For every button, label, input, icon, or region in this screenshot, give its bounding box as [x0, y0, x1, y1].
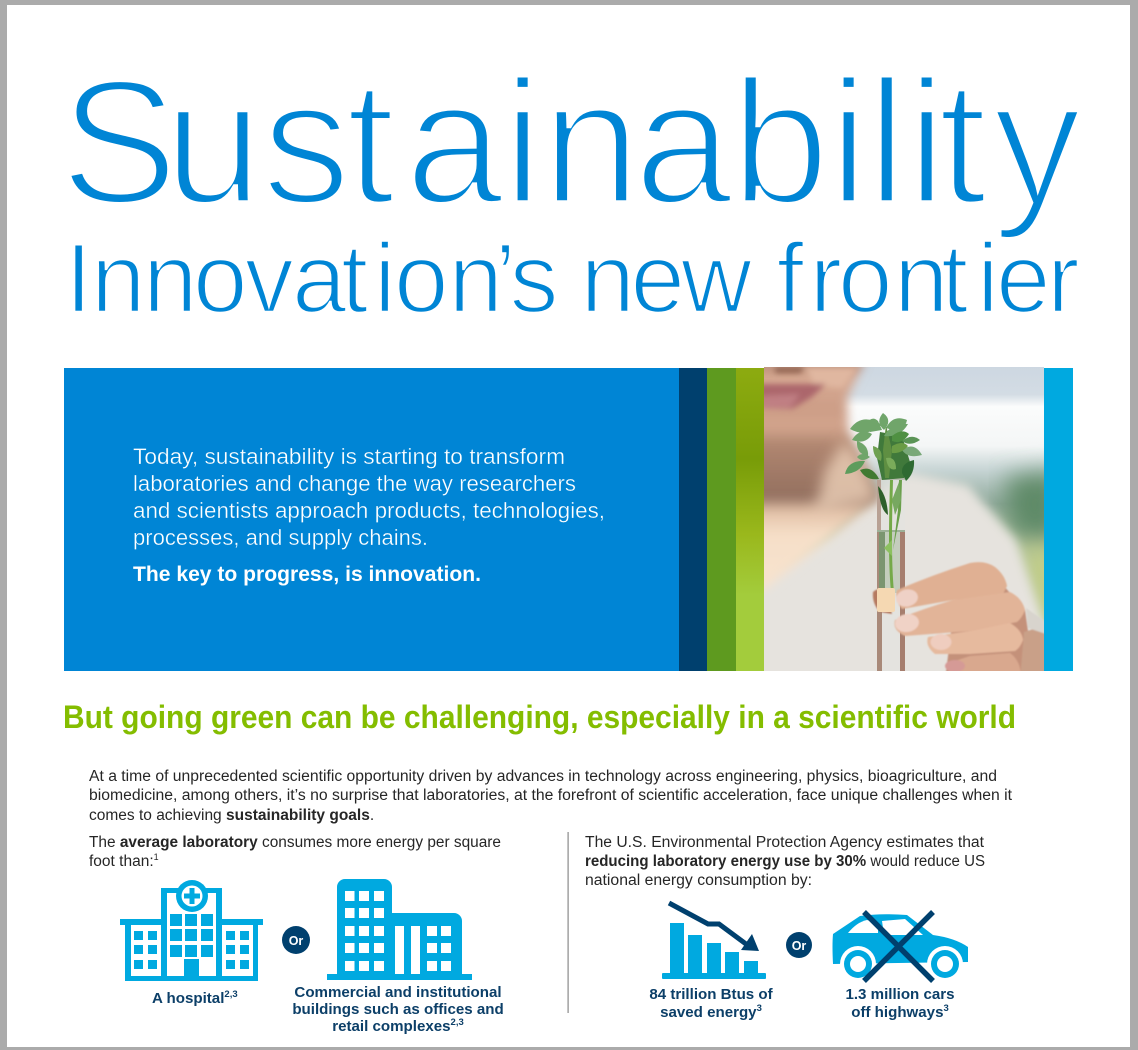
intro text: laboratories and change the way researchers	[133, 471, 576, 496]
panel: average laboratory energy	[89, 834, 504, 1035]
text block: challenges paragraph: comes to achieving sustainability goals.	[89, 807, 374, 824]
text block: EPA estimate: The U.S. Environmental Protection Agency estimates that	[585, 834, 985, 851]
icon: commercial buildings	[327, 879, 472, 980]
label: saved energy: 84 trillion Btus of	[649, 986, 774, 1003]
badge: or: Or	[289, 934, 303, 948]
label: saved energy: saved energy	[660, 1004, 757, 1021]
text block: laboratory comparison: The average laboratory consumes more energy per square	[89, 834, 501, 851]
label: hospital: A hospital	[152, 990, 224, 1007]
icon: falling energy bar chart	[662, 903, 766, 979]
label: commercial buildings: buildings such as offices and	[292, 1001, 504, 1018]
icon: hospital	[120, 880, 263, 981]
photo: scientist holding a plant in a test tube	[764, 367, 1044, 671]
text block: laboratory comparison: 1	[154, 852, 159, 862]
foliage mass	[877, 432, 910, 480]
hand	[873, 562, 1046, 680]
text block: challenges paragraph: At a time of unprecedented scientific opportunity driven by advances in technology across engineering, physics, bioagriculture, and	[89, 768, 997, 785]
plant	[845, 413, 922, 592]
intro background	[64, 368, 679, 671]
text block: EPA estimate: reducing laboratory energy use by 30% would reduce US	[585, 853, 985, 870]
text block: challenges paragraph	[89, 768, 1013, 824]
intro key message: The key to progress, is innovation.	[133, 562, 481, 586]
smile and cheek	[805, 368, 858, 388]
label: cars off highways: 3	[943, 1003, 949, 1014]
intro text	[133, 444, 605, 550]
label: cars off highways: off highways	[851, 1004, 943, 1021]
test tube cap	[877, 588, 895, 612]
label: commercial buildings	[292, 984, 504, 1035]
title	[60, 43, 1082, 333]
text block: EPA estimate	[585, 834, 985, 889]
lips	[758, 384, 826, 409]
badge: or	[282, 926, 310, 954]
text block: laboratory comparison: foot than:	[89, 853, 154, 870]
label: commercial buildings: Commercial and institutional	[294, 984, 502, 1001]
intro text: and scientists approach products, technologies,	[133, 498, 605, 523]
panel: intro banner	[64, 360, 1073, 690]
title: Innovation’s new frontier	[65, 223, 1080, 333]
label: commercial buildings: retail complexes	[332, 1018, 451, 1035]
icon: crossed-out car	[832, 912, 968, 982]
intro text: Today, sustainability is starting to transform	[133, 444, 565, 469]
title: Sustainability	[60, 43, 1082, 241]
shirt	[764, 470, 1044, 671]
skin: face, neck and chest	[764, 367, 877, 589]
panel: EPA energy reduction estimate	[585, 834, 985, 1021]
badge: or: Or	[792, 939, 806, 953]
badge: or	[786, 932, 812, 958]
heading: going green: But going green can be challenging, especially in a scientific world	[63, 699, 1016, 735]
test tube	[875, 478, 905, 671]
text block: challenges paragraph: biomedicine, among others, it’s no surprise that laboratories, at the forefront of scientific acceleration, face unique challenges when it	[89, 787, 1013, 804]
intro text: processes, and supply chains.	[133, 525, 428, 550]
label: cars off highways	[845, 986, 955, 1021]
label: saved energy	[649, 986, 774, 1021]
colour stripes	[679, 368, 1073, 671]
label: hospital: 2,3	[224, 989, 238, 1000]
label: commercial buildings: 2,3	[451, 1017, 464, 1028]
text block: EPA estimate: national energy consumption by:	[585, 872, 812, 889]
text block: laboratory comparison	[89, 834, 501, 870]
label: cars off highways: 1.3 million cars	[845, 986, 955, 1003]
label: saved energy: 3	[757, 1003, 762, 1014]
